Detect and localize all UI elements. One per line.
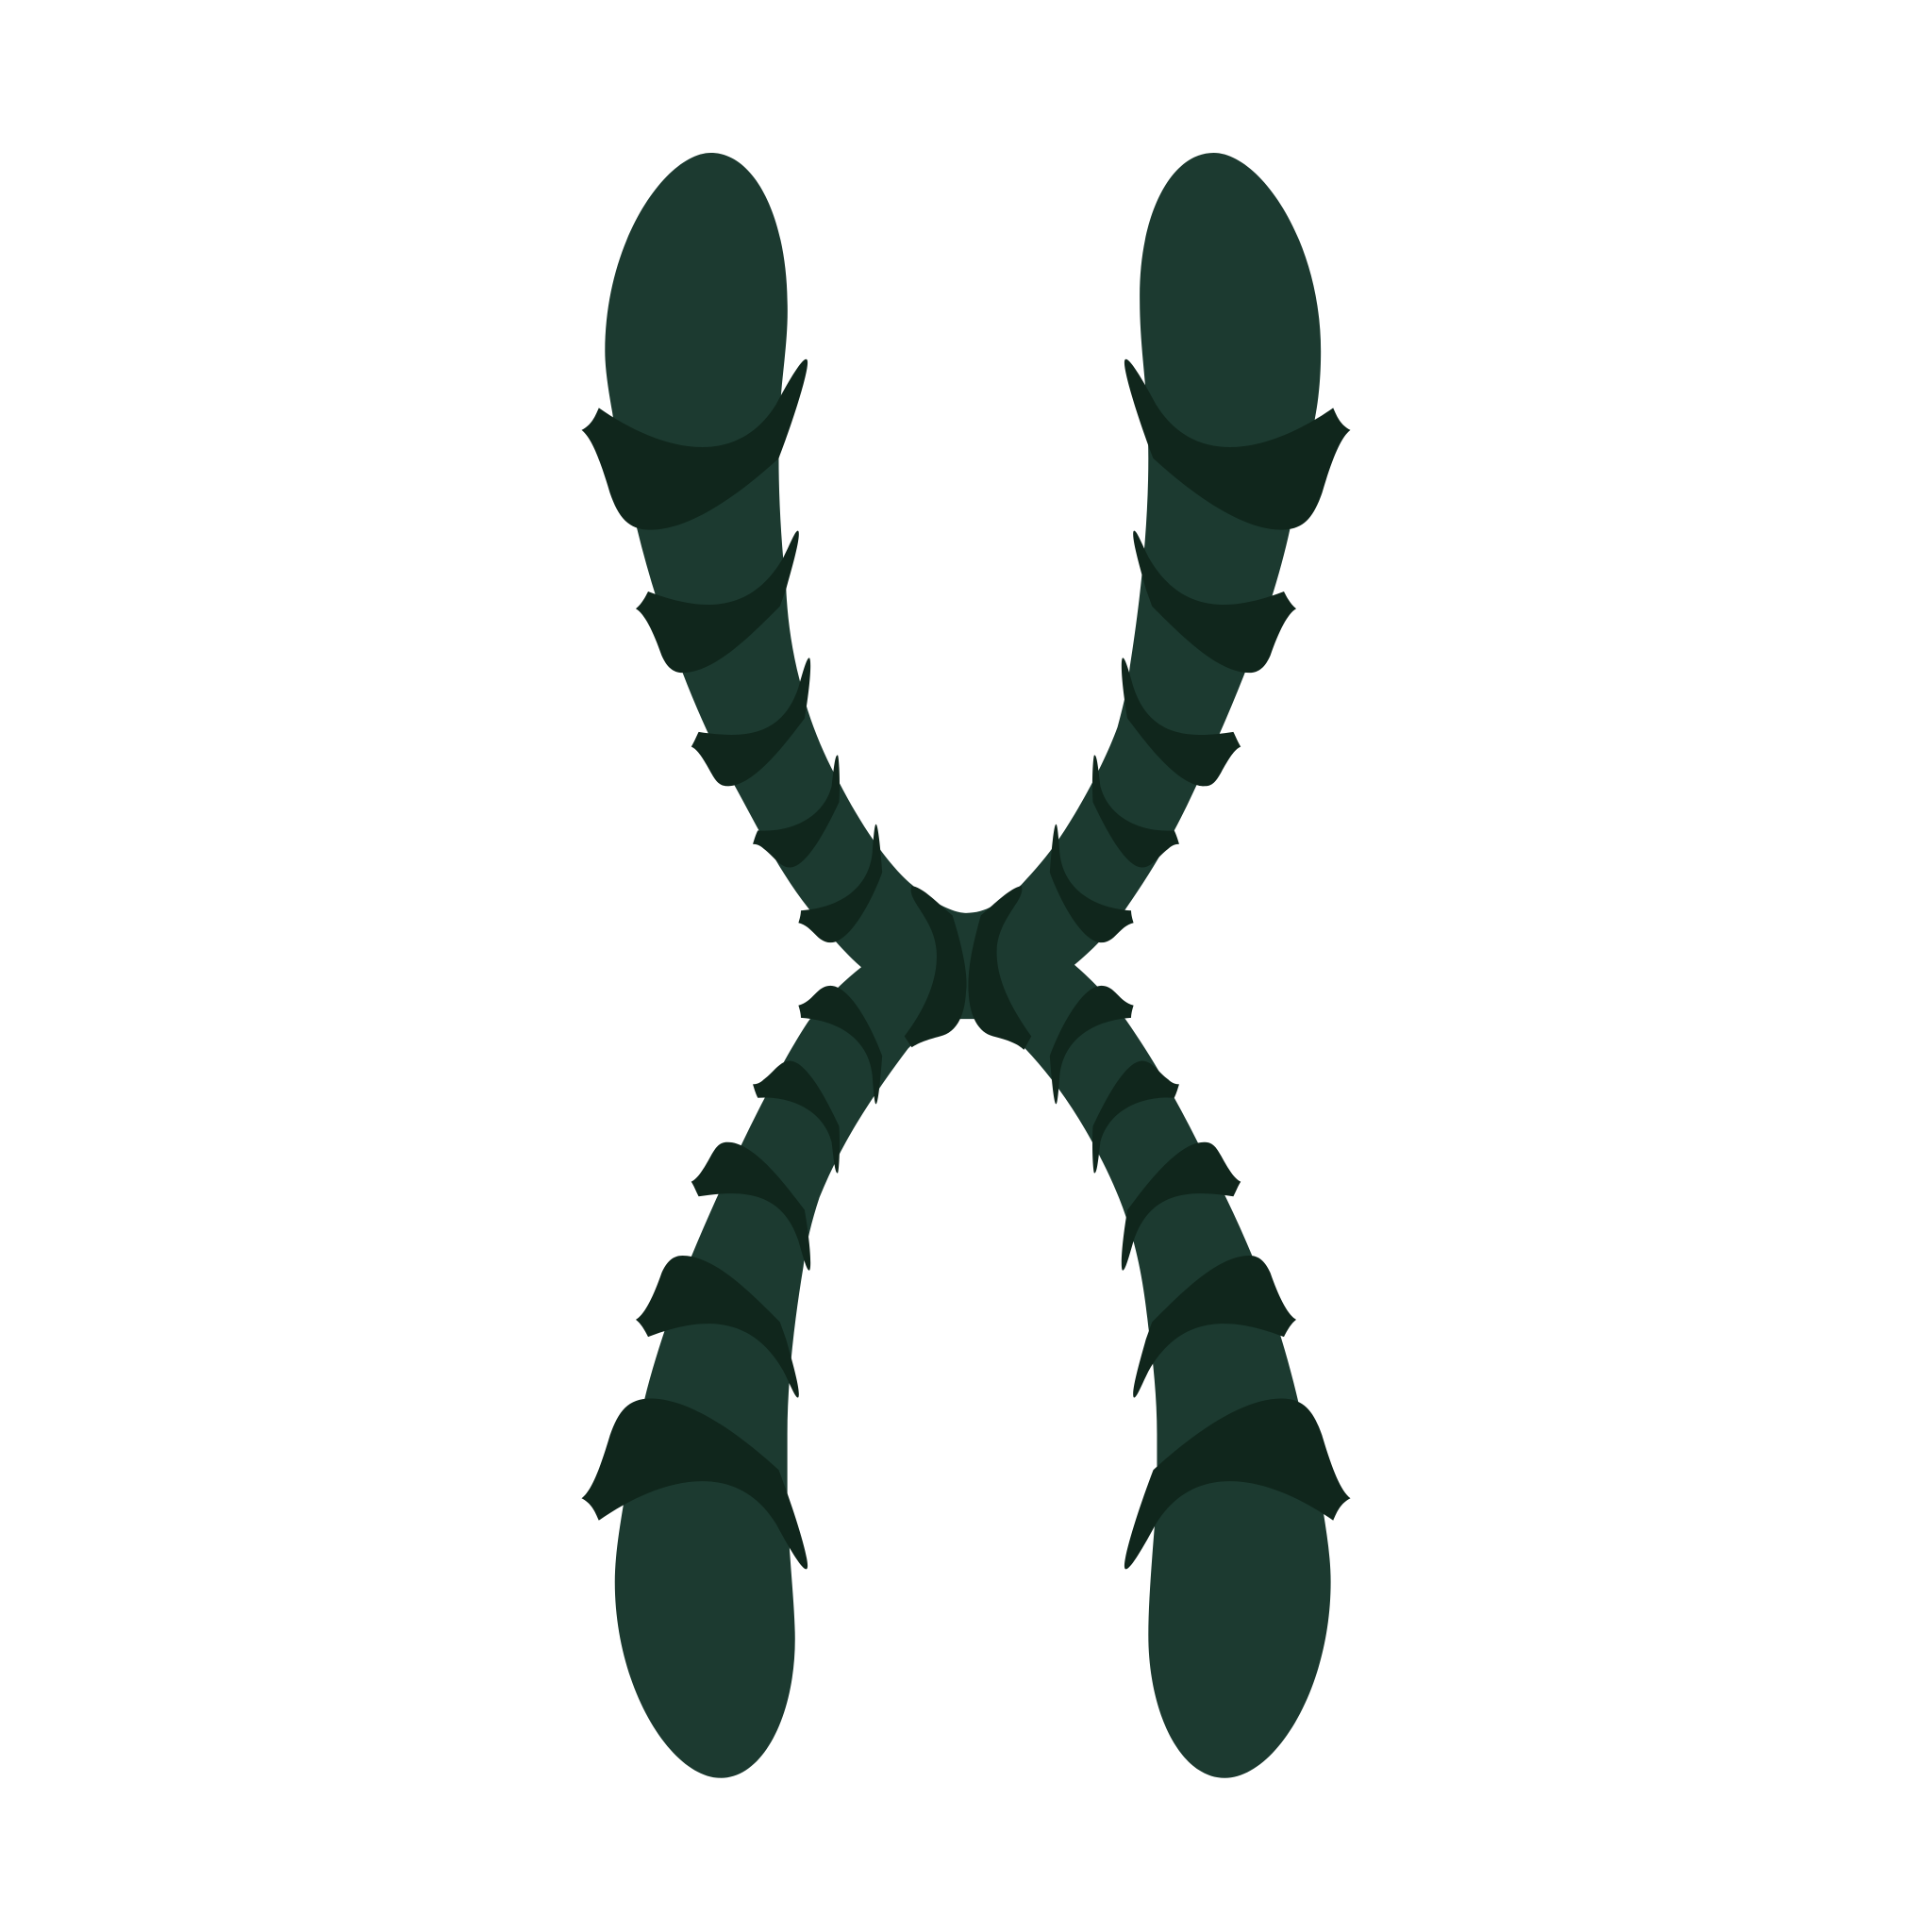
band 4 (1092, 1061, 1179, 1174)
band 2 (1133, 531, 1296, 673)
bands: upper left arm (581, 359, 882, 942)
band 3 (691, 1142, 810, 1271)
bands: upper right arm (1050, 359, 1351, 942)
chromosome body (605, 153, 1331, 1778)
band 1 (1124, 1398, 1351, 1569)
band 1 (1124, 359, 1351, 530)
bands: lower right arm (1050, 986, 1351, 1569)
band 2 (636, 531, 799, 673)
bands: lower left arm (581, 986, 882, 1569)
band 4 (753, 756, 840, 868)
band 1 (581, 1398, 808, 1569)
band 5 (798, 986, 882, 1104)
band 5 (1050, 824, 1134, 942)
band 1 (581, 359, 808, 530)
band 2 (636, 1256, 799, 1397)
band 3 (691, 658, 810, 786)
band 2 (1133, 1256, 1296, 1397)
band 4 (753, 1061, 840, 1174)
band 5 (798, 824, 882, 942)
band 3 (1122, 658, 1241, 786)
band 3 (1122, 1142, 1241, 1271)
centromere band left (905, 886, 967, 1047)
band 4 (1092, 756, 1179, 868)
band 5 (1050, 986, 1134, 1104)
centromere band right (968, 886, 1031, 1050)
